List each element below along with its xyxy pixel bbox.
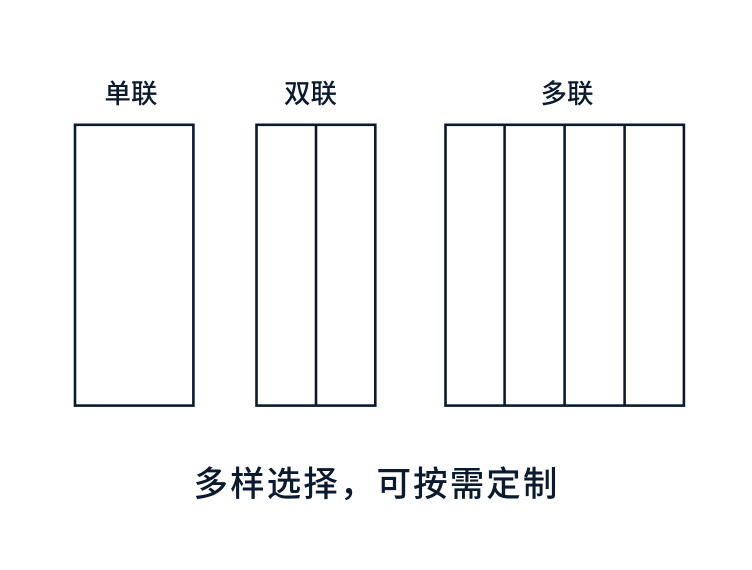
heading: single panel: 单联 bbox=[104, 79, 158, 109]
heading: multi panel: 多联 bbox=[540, 79, 594, 109]
heading: double panel: 双联 bbox=[284, 79, 337, 109]
caption: 多样选择，可按需定制 bbox=[194, 466, 560, 504]
divider: multi third bbox=[623, 125, 626, 406]
panel: single bbox=[75, 125, 193, 406]
divider: multi first bbox=[503, 125, 506, 406]
divider: double centre bbox=[315, 125, 317, 406]
panel: multi bbox=[446, 125, 684, 406]
divider: multi second bbox=[563, 125, 566, 406]
panel: double bbox=[256, 125, 375, 406]
